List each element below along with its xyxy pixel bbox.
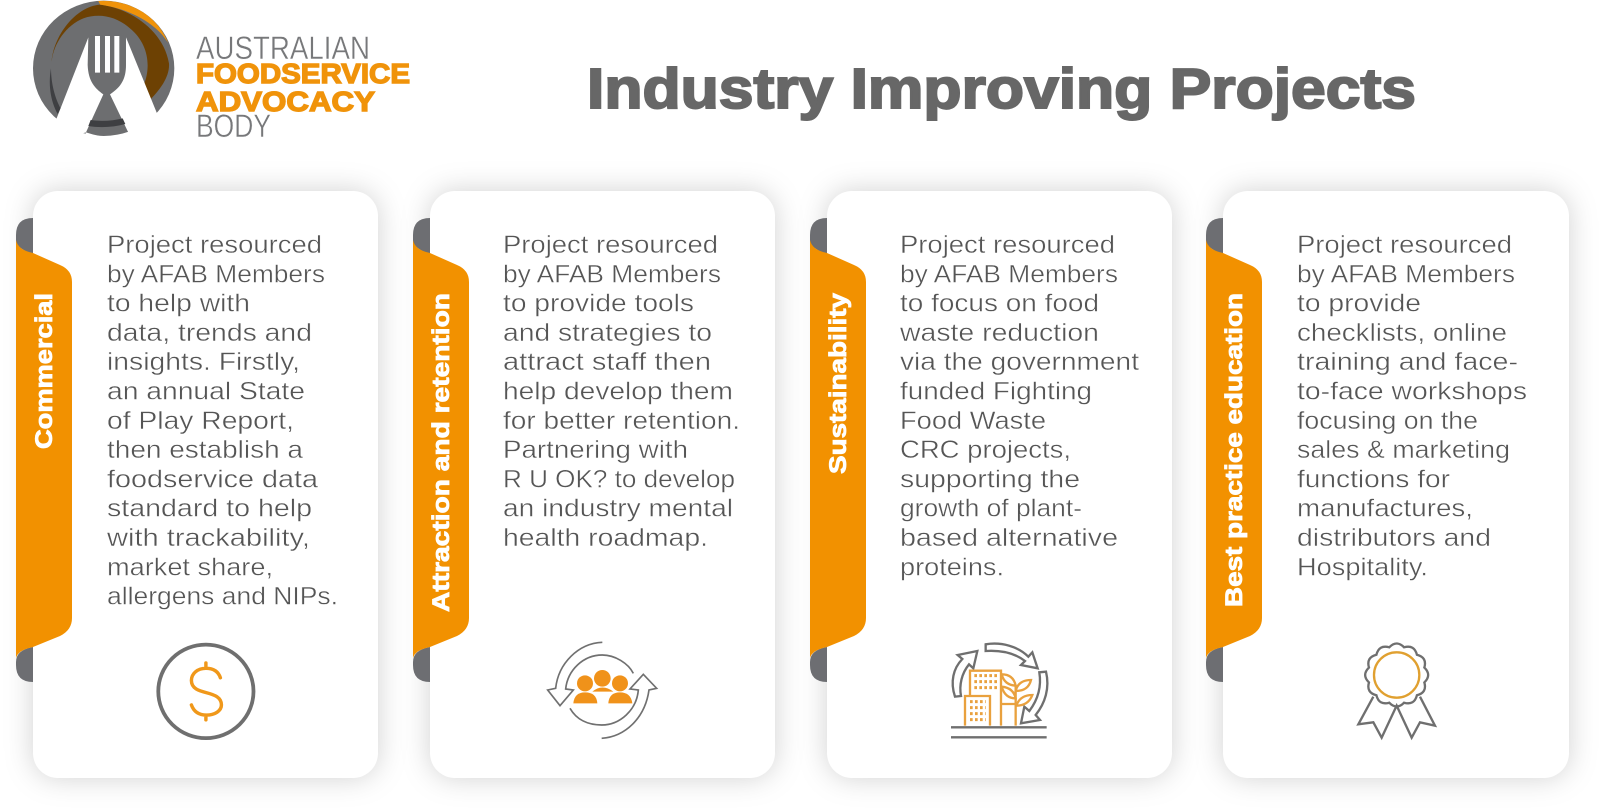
text: attraction description: by AFAB Members [503,260,721,288]
text: best practice description: distributors and [1297,524,1491,552]
logo icon: fork on plate [33,1,174,147]
text: commercial description: market share, [107,553,273,581]
card background [33,191,378,778]
text: best practice description: to provide [1297,290,1421,318]
ribbon: attraction and retention: Attraction and retention [428,293,455,612]
text: sustainability description: Project resourced [900,231,1115,259]
ribbon: sustainability [810,218,866,682]
text: sustainability description: CRC projects, [900,436,1071,464]
text: commercial description: then establish a [107,436,303,464]
text: commercial description [106,231,338,611]
text: commercial description: allergens and NIPs. [107,583,338,611]
text: commercial description: of Play Report, [107,407,294,435]
logo wordmark [196,30,410,144]
panel: commercial [16,191,378,778]
logo [33,1,410,147]
ribbon: attraction and retention [413,218,469,682]
text: commercial description: an annual State [107,378,305,406]
card background [430,191,775,778]
text: attraction description: help develop them [503,378,733,406]
text: best practice description: checklists, online [1297,319,1507,347]
text: best practice description: Project resourced [1297,231,1512,259]
text: attraction description: for better retention. [503,407,740,435]
text: best practice description: to-face workshops [1297,378,1527,406]
text: attraction description: attract staff then [503,348,711,376]
panel: attraction and retention [413,191,775,778]
text: commercial description: Project resourced [107,231,322,259]
text: best practice description: by AFAB Members [1297,260,1515,288]
text: sustainability description: proteins. [900,553,1004,581]
text: sustainability description: to focus on food [900,290,1099,318]
ribbon: commercial [16,218,72,682]
icon: dollar coin [158,645,254,738]
logo wordmark: AUSTRALIAN [196,30,370,66]
text: best practice description: training and face- [1297,348,1518,376]
ribbon: best practice education: Best practice education [1221,293,1248,607]
text: commercial description: foodservice data [107,465,318,493]
text: best practice description: manufactures, [1297,495,1473,523]
text: commercial description: standard to help [107,495,312,523]
text: best practice description: Hospitality. [1297,553,1428,581]
text: sustainability description: waste reduction [899,319,1099,347]
text: commercial description: insights. Firstly, [107,348,300,376]
logo wordmark: BODY [196,108,271,144]
card background [827,191,1172,778]
logo wordmark: ADVOCACY [196,86,375,117]
text: best practice description: functions for [1297,465,1450,493]
text: commercial description: to help with [107,290,250,318]
ribbon: sustainability: Sustainability [825,292,852,474]
panel: sustainability [810,191,1172,778]
icon: people with cycle arrows [548,642,657,738]
card background [1223,191,1569,778]
text: sustainability description [899,231,1139,581]
text: sustainability description: by AFAB Members [900,260,1118,288]
text: sustainability description: based alternative [900,524,1118,552]
icon: award rosette [1358,643,1435,738]
text: attraction description: to provide tools [503,290,694,318]
text: best practice description: focusing on the [1297,407,1478,435]
text: sustainability description: growth of plant- [900,495,1082,523]
ribbon: commercial: Commercial [31,293,58,449]
text: sustainability description: supporting the [900,465,1080,493]
text: attraction description: and strategies to [503,319,712,347]
text: attraction description: health roadmap. [503,524,708,552]
text: sustainability description: via the government [900,348,1139,376]
text: best practice description [1297,231,1527,581]
text: attraction description: an industry mental [503,495,733,523]
text: attraction description: Partnering with [503,436,688,464]
text: commercial description: with trackability, [106,524,310,552]
text: attraction description [503,231,740,552]
text: sustainability description: Food Waste [900,407,1046,435]
text: sustainability description: funded Fighting [900,378,1092,406]
text: best practice description: sales & marketing [1297,436,1510,464]
icon: buildings and plant with cycle arrows [951,644,1047,737]
text: attraction description: R U OK? to develop [503,465,735,493]
text: commercial description: by AFAB Members [107,260,325,288]
text: commercial description: data, trends and [107,319,312,347]
ribbon: best practice education [1206,218,1262,682]
title: Industry Improving Projects [587,57,1416,121]
text: attraction description: Project resourced [503,231,718,259]
panel: best practice education [1206,191,1569,778]
logo wordmark: FOODSERVICE [196,58,410,89]
